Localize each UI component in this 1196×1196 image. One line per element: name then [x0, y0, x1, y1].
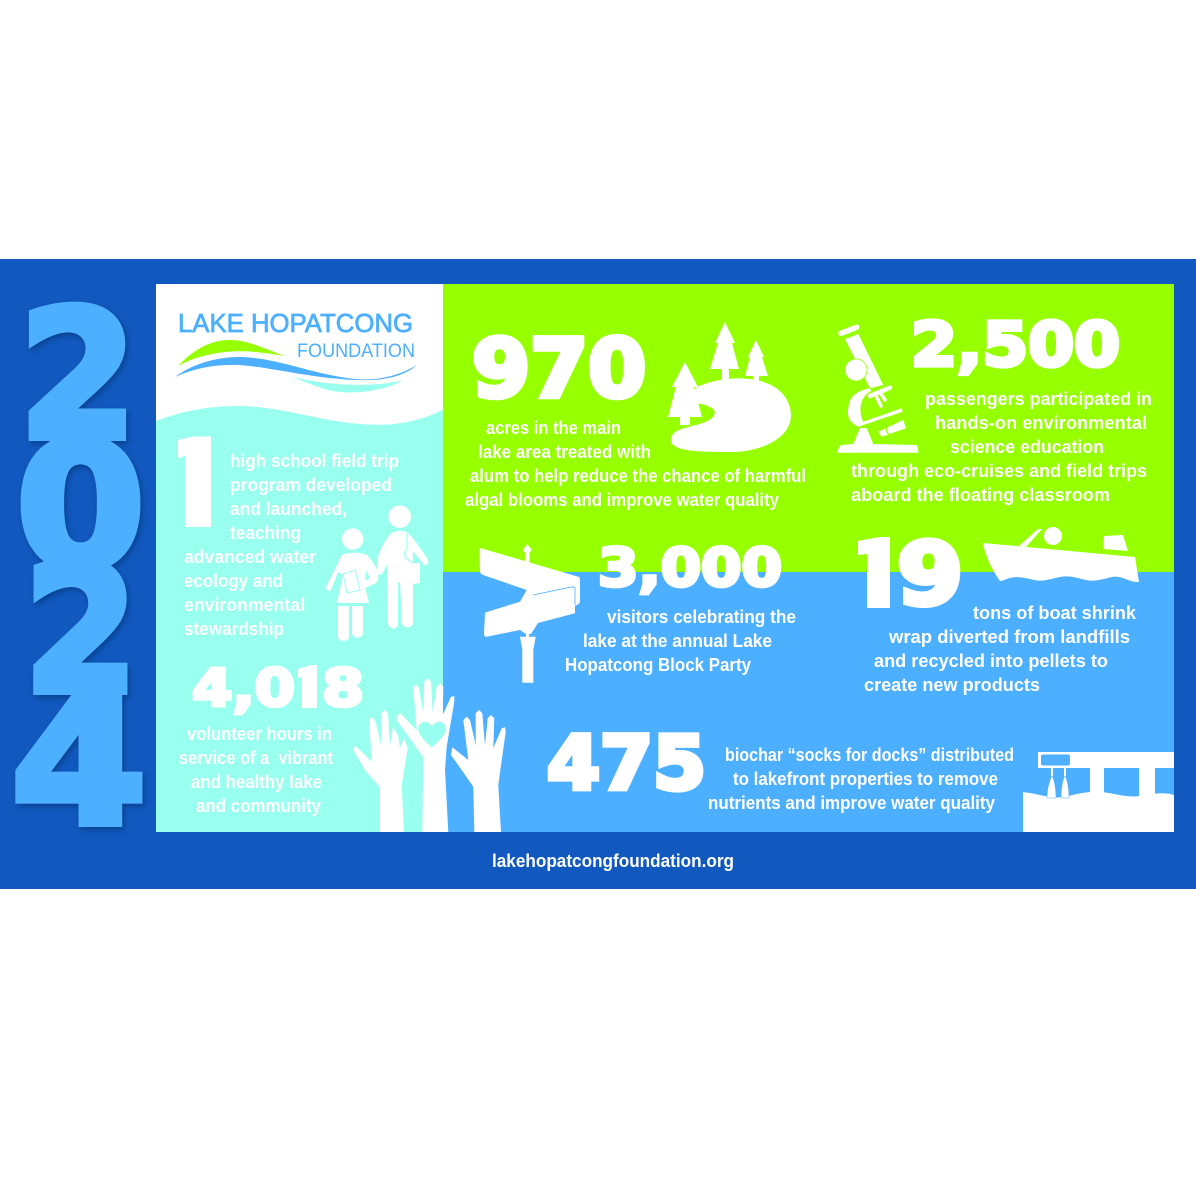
number 1: 1 — [158, 420, 239, 555]
number — [858, 537, 960, 608]
description: acres in the main — [486, 418, 621, 438]
description — [565, 607, 796, 675]
description: algal blooms and improve water quality — [465, 490, 779, 510]
number: 3,000 — [598, 538, 782, 599]
description: and launched, — [230, 499, 347, 519]
description — [179, 724, 333, 816]
description: hands-on environmental — [935, 413, 1147, 433]
number: 475 — [547, 721, 706, 807]
logo subtitle: FOUNDATION — [297, 340, 415, 362]
number: 9 — [897, 525, 963, 625]
number: 970 — [472, 322, 646, 416]
description: and recycled into pellets to — [874, 651, 1108, 671]
icon: students — [326, 505, 428, 641]
panel: aqua left column — [156, 284, 443, 832]
description: biochar “socks for docks” distributed — [725, 745, 1014, 765]
description: tons of boat shrink — [973, 603, 1137, 623]
year 2024: 0 — [16, 406, 145, 607]
logo green swoosh — [178, 340, 285, 366]
logo aqua swoosh — [293, 377, 403, 392]
description — [864, 603, 1137, 695]
description: lake area treated with — [478, 442, 651, 462]
icon: boat — [983, 527, 1139, 582]
number — [192, 665, 362, 716]
panel: green upper area — [443, 284, 1174, 572]
stat: 19 tons — [858, 537, 1136, 695]
description: teaching — [230, 523, 301, 543]
description — [708, 745, 1014, 813]
logo blue swoosh — [175, 357, 417, 380]
stat: 970 acres — [465, 322, 806, 510]
number: 1 — [291, 659, 327, 719]
icon: street sign — [479, 544, 580, 683]
description: wrap diverted from landfills — [888, 627, 1130, 647]
description: through eco-cruises and field trips — [851, 461, 1147, 481]
blue background band — [0, 259, 1196, 889]
stat: 4,018 volunteer hours — [179, 659, 364, 816]
description: Hopatcong Block Party — [565, 655, 751, 675]
year 2024: 4 — [11, 660, 147, 865]
description: aboard the floating classroom — [851, 485, 1110, 505]
description: volunteer hours in — [187, 724, 332, 744]
number: 8 — [322, 659, 364, 719]
icon: dock with socks — [1023, 752, 1174, 832]
description: nutrients and improve water quality — [708, 793, 995, 813]
description: to lakefront properties to remove — [733, 769, 998, 789]
stat: 1 field trip program — [178, 436, 398, 639]
panel: blue lower area — [443, 572, 1174, 832]
description: and community — [196, 796, 321, 816]
description: environmental — [184, 595, 305, 615]
logo — [175, 310, 417, 392]
description — [465, 418, 806, 510]
description: alum to help reduce the chance of harmful — [470, 466, 806, 486]
icon: island with trees — [668, 322, 791, 452]
description: and healthy lake — [191, 772, 322, 792]
year 2024 — [11, 273, 147, 865]
panel: white logo header with wave — [156, 284, 443, 425]
description: high school field trip — [230, 451, 399, 471]
stat: 2,500 passengers — [851, 310, 1152, 505]
description: visitors celebrating the — [607, 607, 796, 627]
stat: 3,000 visitors — [565, 538, 796, 675]
number: 2,500 — [911, 310, 1120, 380]
icon: microscope — [838, 327, 918, 453]
description: advanced water — [184, 547, 316, 567]
description: ecology and — [184, 571, 283, 591]
number: 1 — [847, 521, 910, 626]
stat: 475 biochar socks — [547, 721, 1014, 813]
description — [851, 389, 1152, 505]
description: service of a vibrant — [179, 748, 333, 768]
year 2024: 2 — [19, 273, 137, 479]
description: passengers participated in — [925, 389, 1152, 409]
year 2024: 2 — [24, 528, 138, 733]
icon: raised hands with heart — [353, 678, 506, 832]
description: create new products — [864, 675, 1040, 695]
footer website: lakehopatcongfoundation.org — [492, 850, 734, 871]
description: program developed — [230, 475, 392, 495]
description — [184, 451, 399, 639]
description: stewardship — [184, 619, 284, 639]
description: science education — [950, 437, 1104, 457]
logo name: LAKE HOPATCONG — [178, 310, 413, 338]
number: 4,0 — [192, 659, 295, 719]
description: lake at the annual Lake — [583, 631, 772, 651]
